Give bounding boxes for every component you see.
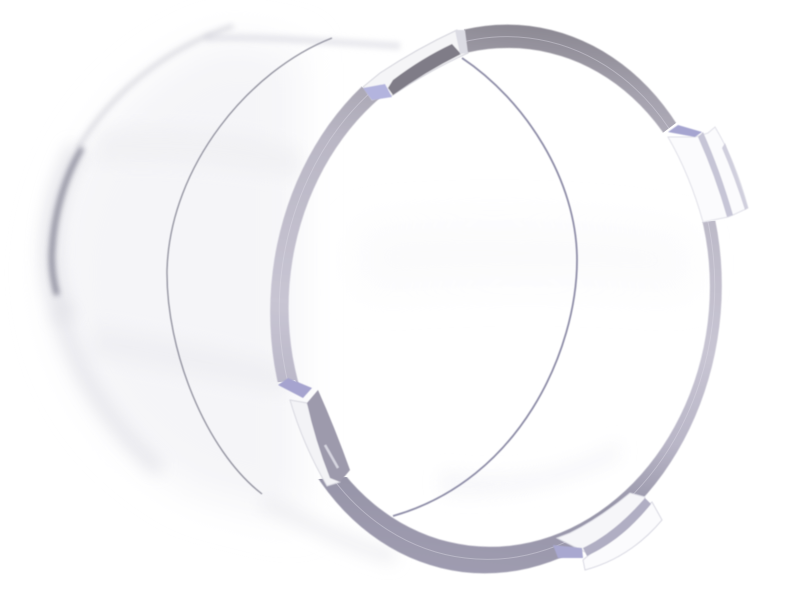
- seam line: outer arc: [167, 38, 332, 494]
- tab: bottom: [553, 493, 662, 570]
- tab: left: [278, 378, 350, 486]
- tab: top: [363, 30, 468, 100]
- cylinder body haze: [52, 38, 690, 558]
- ring ridge highlight: [279, 36, 715, 560]
- main front ring: [270, 24, 722, 574]
- tab: right: [668, 125, 748, 222]
- back rim: inner arc: [393, 58, 577, 516]
- far rim: fuzzy left edge: [51, 26, 233, 470]
